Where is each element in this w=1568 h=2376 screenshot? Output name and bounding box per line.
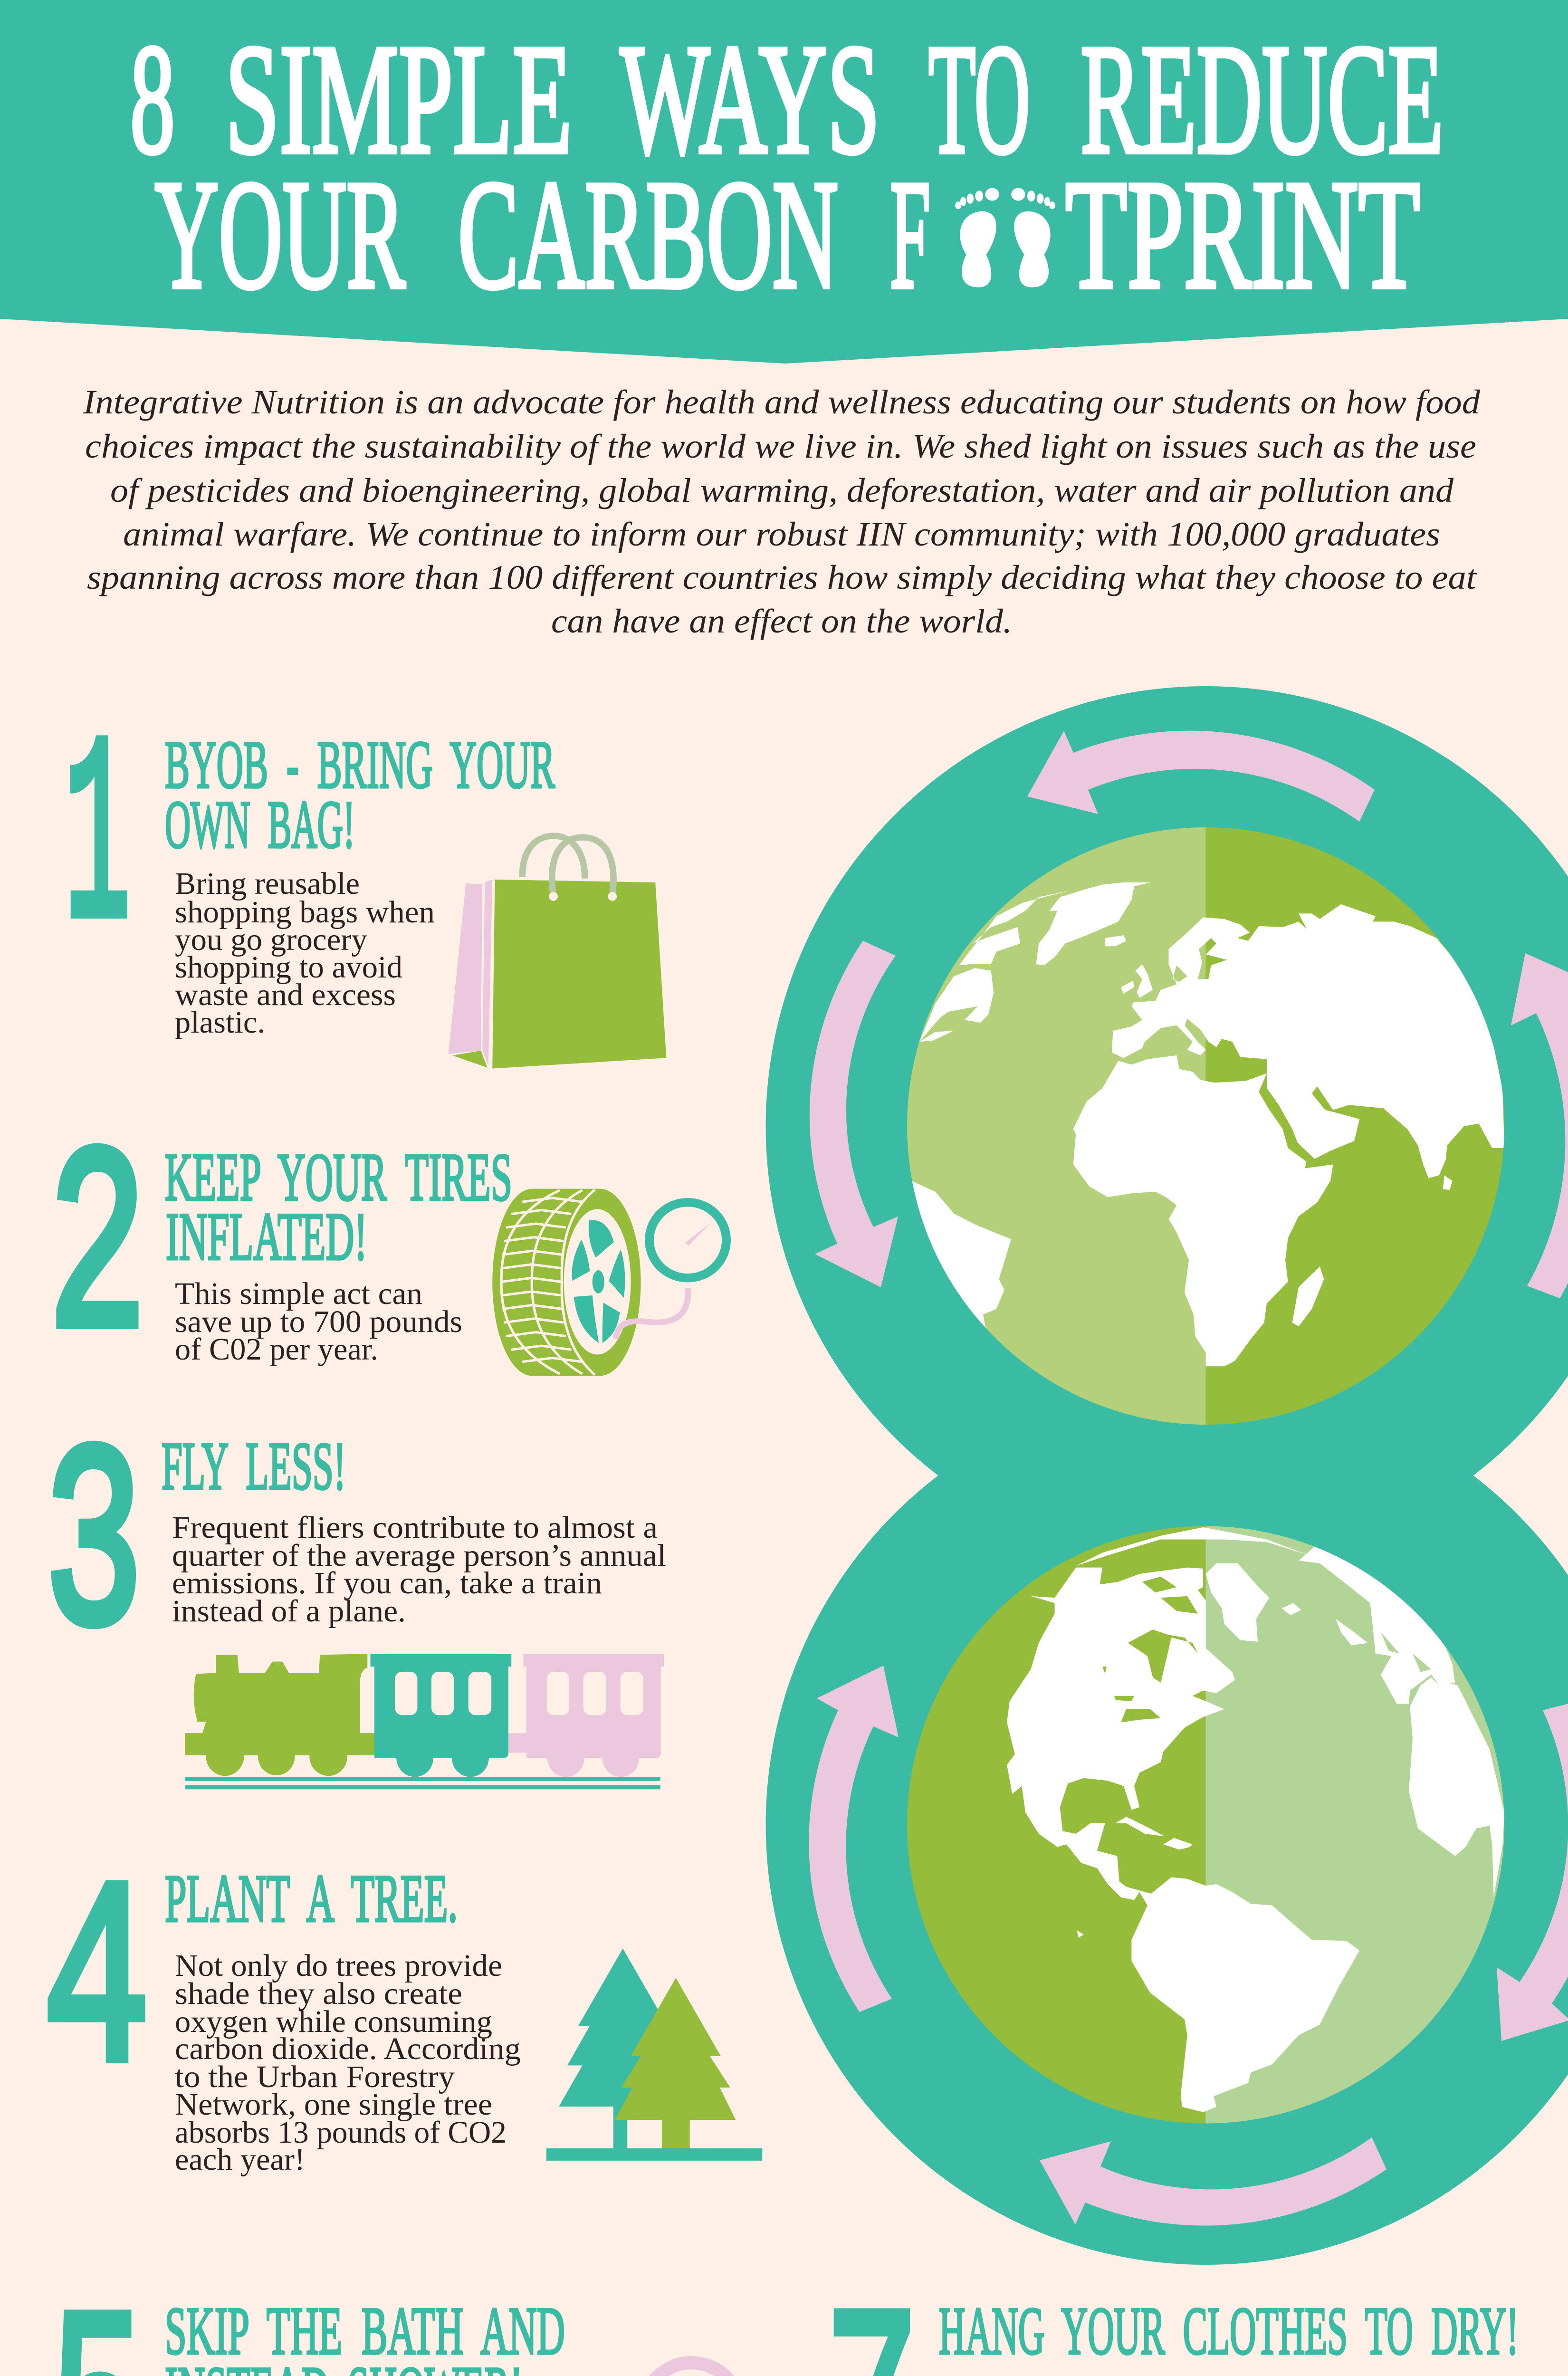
body 4: absorbs 13 pounds of CO2 xyxy=(175,2115,507,2150)
body 4: to the Urban Forestry xyxy=(175,2060,455,2094)
arrow: lower right xyxy=(1497,1701,1568,2041)
body 2: This simple act can xyxy=(175,1276,422,1311)
intro paragraph: animal warfare. We continue to inform our robust IIN community; with 100,000 graduates xyxy=(123,515,1440,553)
heading 4: PLANT A TREE. xyxy=(165,1861,458,1936)
tip 1 xyxy=(64,694,666,1069)
tip 1: 1 xyxy=(64,694,131,993)
body 1: shopping to avoid xyxy=(175,950,402,985)
body 4: oxygen while consuming xyxy=(175,2004,492,2039)
arrow: upper left xyxy=(810,941,898,1287)
body 3 xyxy=(172,1510,666,1629)
arrow: upper right xyxy=(1511,953,1568,1298)
body 3: emissions. If you can, take a train xyxy=(172,1566,602,1600)
body 2 xyxy=(175,1276,462,1367)
body 4: Network, one single tree xyxy=(175,2087,492,2122)
heading 1: BYOB - BRING YOUR xyxy=(165,727,555,802)
icon: train xyxy=(185,1654,664,1789)
intro paragraph: Integrative Nutrition is an advocate for health and wellness educating our students on how food xyxy=(83,383,1481,421)
body 4: shade they also create xyxy=(175,1976,462,2011)
intro paragraph: of pesticides and bioengineering, global warming, deforestation, water and air pollution and xyxy=(110,471,1454,509)
title line 2: F xyxy=(890,148,930,321)
heading 5: SKIP THE BATH AND xyxy=(165,2293,565,2368)
body 3: instead of a plane. xyxy=(172,1594,406,1629)
number 2: 2 xyxy=(48,1105,147,1404)
icon: tire and pressure gauge xyxy=(492,1189,727,1376)
arrow: lower left xyxy=(809,1666,899,2012)
heading 2: KEEP YOUR TIRES xyxy=(165,1140,512,1215)
globe: Europe and Africa xyxy=(903,822,1510,1430)
title line 2: CARBON xyxy=(458,148,838,321)
title line 1: SIMPLE xyxy=(225,12,572,186)
intro paragraph xyxy=(83,383,1481,640)
body 1: Bring reusable xyxy=(175,866,360,901)
body 1 xyxy=(175,866,435,1040)
body 2: save up to 700 pounds xyxy=(175,1304,462,1339)
body 3: Frequent fliers contribute to almost a xyxy=(172,1510,658,1545)
body 1: waste and excess xyxy=(175,977,396,1012)
icon: footprints xyxy=(955,188,1055,287)
heading 3: FLY LESS! xyxy=(162,1428,346,1504)
body 4: each year! xyxy=(175,2142,305,2177)
title line 1: WAYS xyxy=(620,12,880,186)
icon: trees xyxy=(546,1948,762,2161)
title line 2: YOUR xyxy=(155,148,406,321)
number 3: 3 xyxy=(44,1402,143,1701)
tip 4 xyxy=(42,1839,762,2177)
body 1: plastic. xyxy=(175,1005,265,1040)
body 1: you go grocery xyxy=(175,922,367,957)
heading 2 xyxy=(165,1140,512,1274)
tip 3 xyxy=(44,1402,666,1789)
body 4 xyxy=(175,1948,521,2177)
intro paragraph: can have an effect on the world. xyxy=(551,602,1012,640)
title line 1: 8 xyxy=(130,12,175,186)
tip 2 xyxy=(48,1105,727,1404)
intro paragraph: choices impact the sustainability of the world we live in. We shed light on issues such as the use xyxy=(85,427,1476,465)
arrow: lower bottom xyxy=(1040,2137,1386,2226)
heading 5 xyxy=(165,2293,565,2376)
heading 2: INFLATED! xyxy=(166,1199,367,1274)
title line 2 xyxy=(155,148,1420,321)
title line 1 xyxy=(130,12,1444,186)
body 4: carbon dioxide. According xyxy=(175,2031,521,2066)
body 1: shopping bags when xyxy=(175,895,435,929)
intro paragraph: spanning across more than 100 different countries how simply deciding what they choose to eat xyxy=(87,558,1477,596)
body 3: quarter of the average person’s annual xyxy=(172,1538,666,1573)
tip 5 xyxy=(50,2269,742,2376)
tip 7 xyxy=(824,2267,1519,2376)
body 2: of C02 per year. xyxy=(175,1332,378,1367)
globe: Americas xyxy=(903,1521,1510,2129)
title line 1: TO xyxy=(928,12,1030,186)
arrow: upper top xyxy=(1027,731,1375,822)
heading 1: OWN BAG! xyxy=(165,787,355,862)
icon: shower xyxy=(576,2363,742,2376)
header banner xyxy=(0,0,1568,364)
icon: shopping bag xyxy=(449,836,666,1069)
body 4: Not only do trees provide xyxy=(175,1948,502,1983)
figure eight ring xyxy=(766,686,1568,2265)
number 4: 4 xyxy=(42,1839,151,2138)
heading 1 xyxy=(165,727,555,862)
